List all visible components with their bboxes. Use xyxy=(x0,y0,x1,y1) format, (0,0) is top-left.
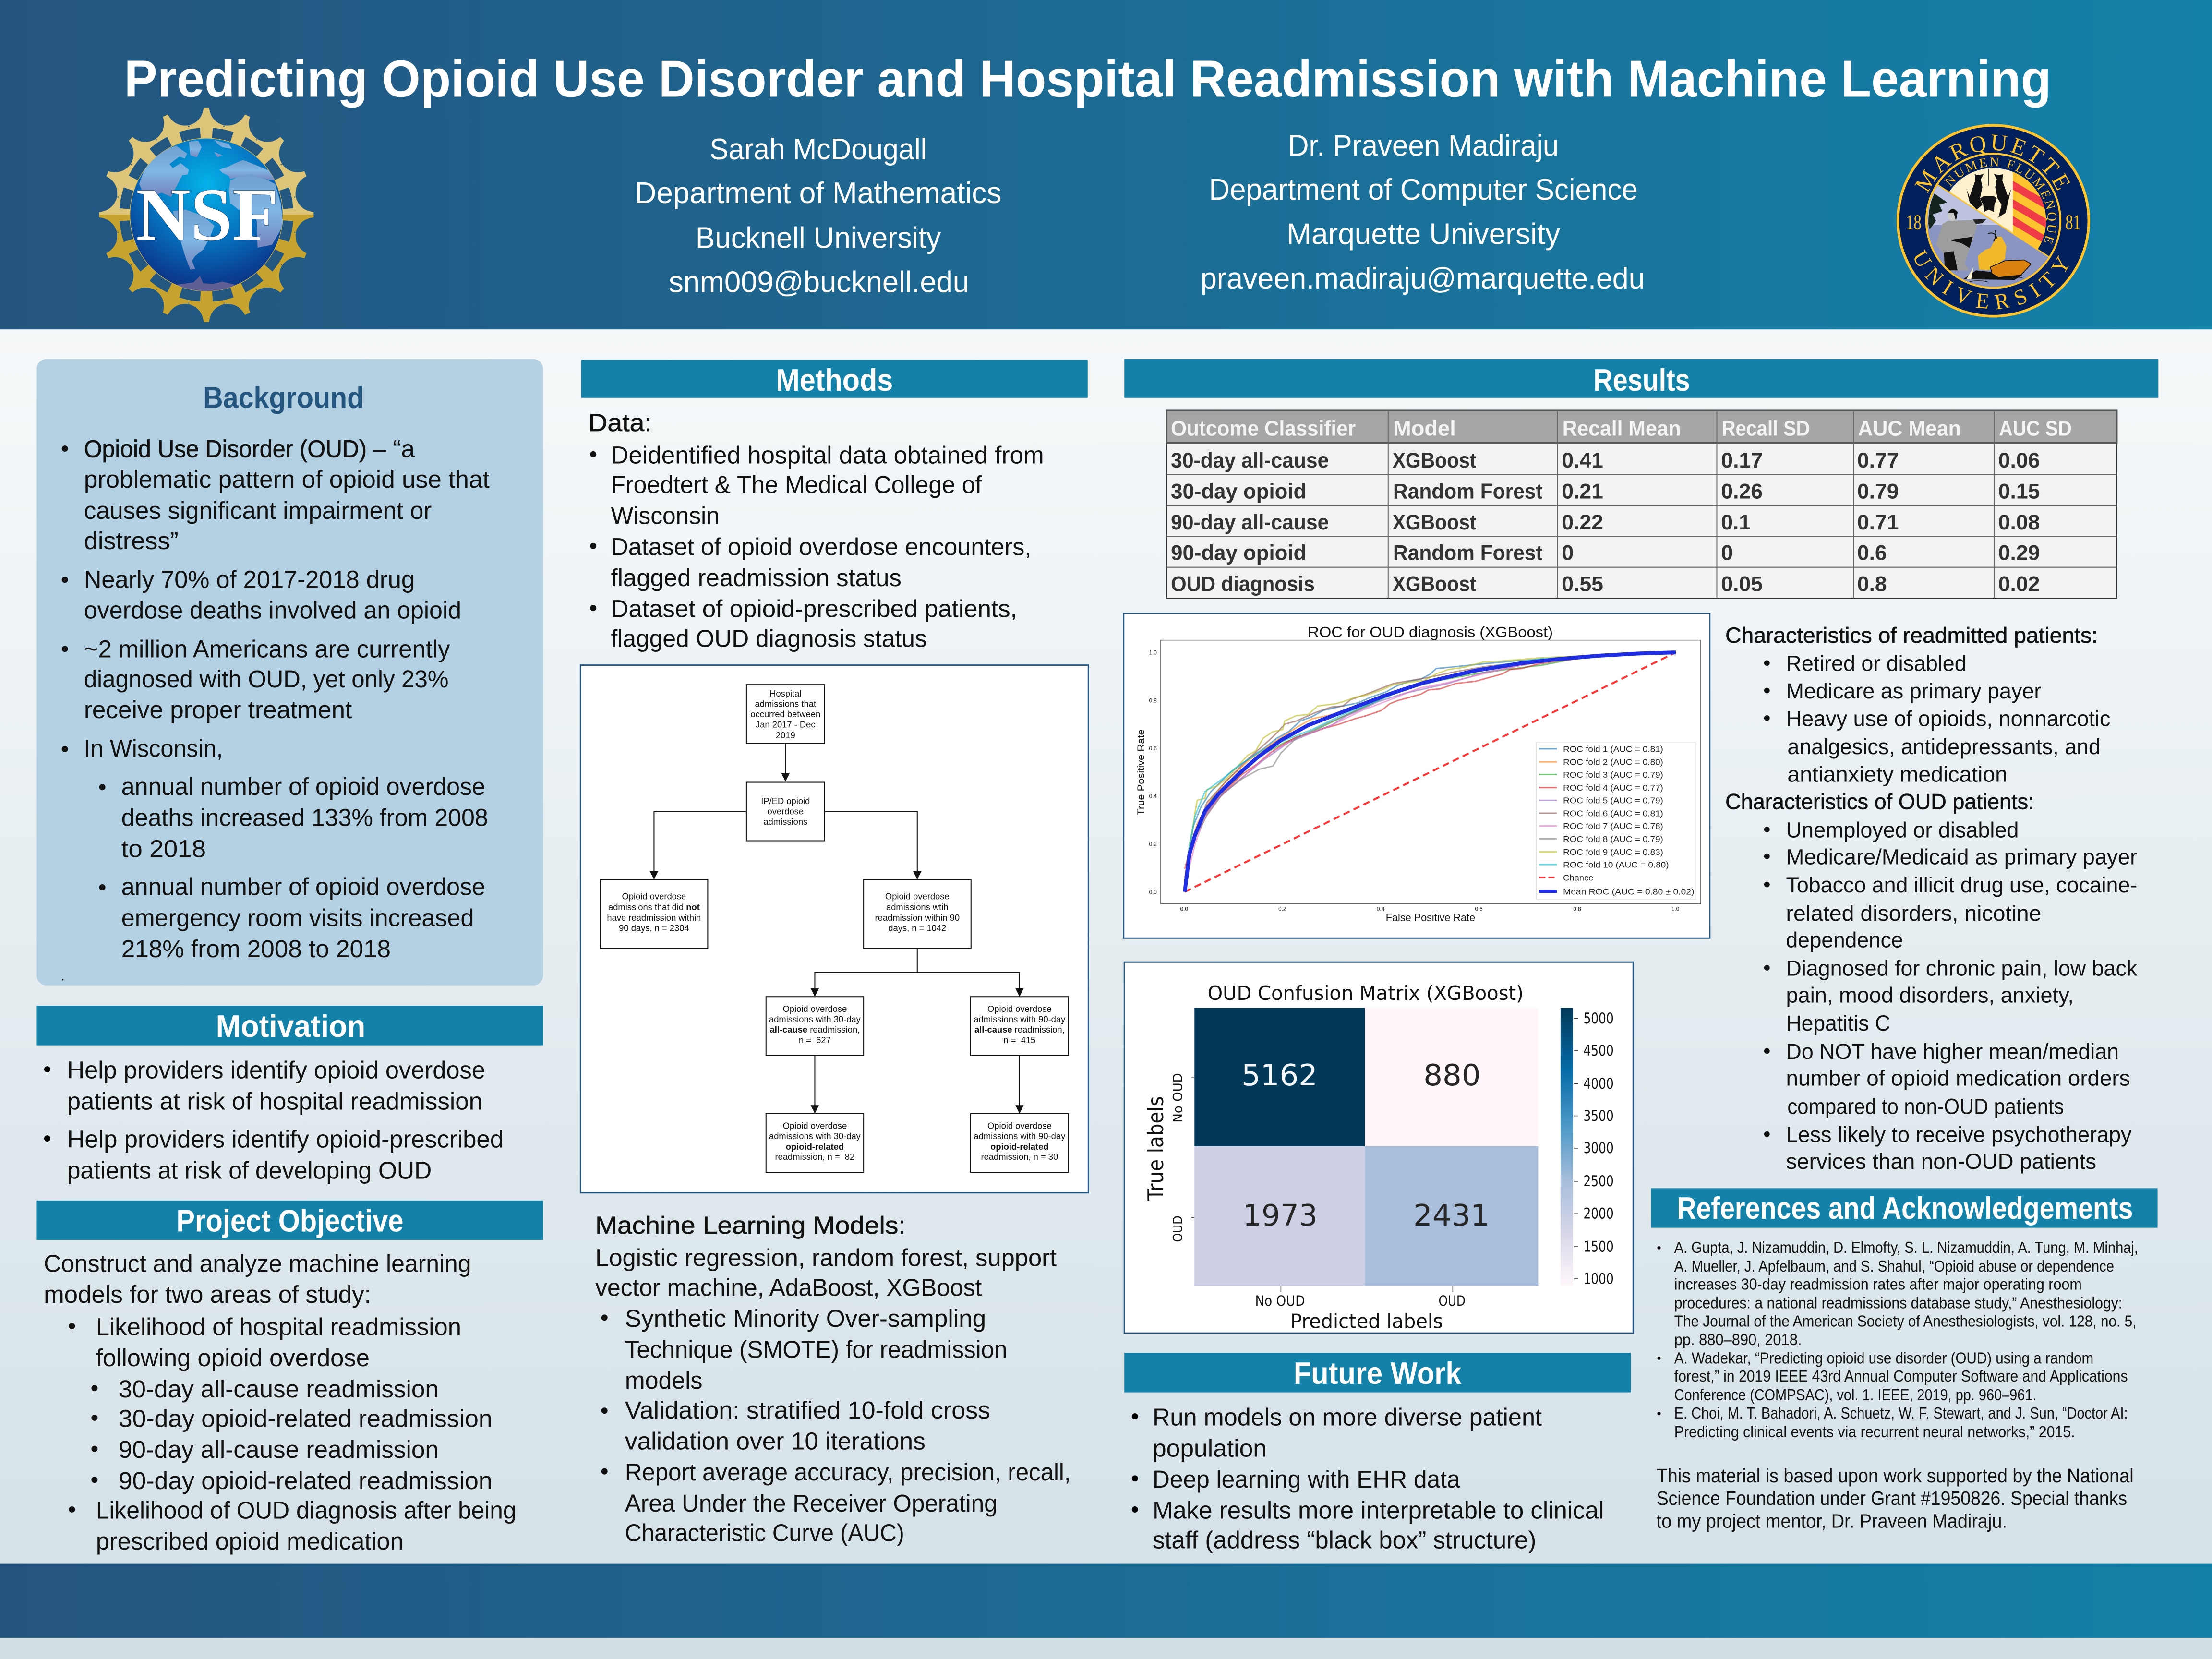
flowchart: patient cohort: admissions with 90-day xyxy=(974,1131,1066,1141)
table: classifier results: 0.71 xyxy=(1857,511,1899,534)
text block: references: pp. 880–890, 2018. xyxy=(1674,1331,1802,1349)
text block: patient characteristics: Less likely to receive psychotherapy xyxy=(1786,1122,2132,1147)
colorbar xyxy=(1561,1008,1614,1287)
table: classifier results: 0.02 xyxy=(1998,572,2040,596)
flowchart: patient cohort: 2019 xyxy=(776,730,795,740)
text block: background bullets xyxy=(62,434,490,980)
text block: project objective: 30-day opioid-related readmission xyxy=(119,1405,493,1432)
text block: machine learning models: vector machine, AdaBoost, XGBoost xyxy=(595,1273,982,1301)
chart: confusion matrix: 5162 xyxy=(1241,1058,1318,1093)
text block: patient characteristics: Do NOT have higher mean/median xyxy=(1786,1039,2119,1064)
text block: patient characteristics: pain, mood disorders, anxiety, xyxy=(1786,983,2074,1007)
icon: Marquette University seal: NUMEN FLUMENQUE xyxy=(1944,157,2056,244)
author block: Sarah McDougall: Department of Mathematics xyxy=(635,177,1002,210)
header banner xyxy=(0,0,2212,329)
text block: data: Wisconsin xyxy=(611,502,720,529)
text block: patient characteristics: Medicare as primary payer xyxy=(1786,679,2041,703)
text block: motivation bullets xyxy=(44,1056,504,1184)
heading: future work: Future Work xyxy=(1294,1356,1462,1391)
chart: confusion matrix: OUD xyxy=(1171,1215,1186,1242)
chart: confusion matrix: OUD xyxy=(1439,1293,1466,1309)
legend: ROC folds xyxy=(1536,742,1696,900)
text block: data: Froedtert & The Medical College of xyxy=(611,470,982,498)
chart: confusion matrix: 2431 xyxy=(1413,1198,1490,1233)
text block: machine learning models: Logistic regression, random forest, support xyxy=(595,1244,1057,1272)
flowchart: patient cohort: Opioid overdose xyxy=(987,1004,1052,1014)
text block: patient characteristics: related disorders, nicotine xyxy=(1786,901,2041,926)
legend: ROC folds: ROC fold 9 (AUC = 0.83) xyxy=(1563,847,1663,857)
chart: confusion matrix: 1973 xyxy=(1243,1198,1318,1233)
legend: ROC folds: Mean ROC (AUC = 0.80 ± 0.02) xyxy=(1563,887,1694,896)
flowchart: patient cohort: admissions that did not xyxy=(608,902,700,912)
text block: references: forest,” in 2019 IEEE 43rd Annual Computer Software and Applications xyxy=(1674,1367,2128,1385)
chart: confusion matrix xyxy=(1124,962,1633,1333)
colorbar: 1500 xyxy=(1583,1238,1614,1255)
flowchart: patient cohort: readmission within 90 xyxy=(875,913,960,923)
icon: NSF logo: NSF xyxy=(136,173,278,257)
text block: background bullets: distress” xyxy=(84,527,179,554)
chart: confusion matrix: 880 xyxy=(1423,1058,1481,1093)
heading: methods: Methods xyxy=(776,362,893,397)
panel: results xyxy=(1124,359,2158,1333)
table: classifier results: AUC SD xyxy=(1999,417,2072,440)
text block: project objective: 30-day all-cause readmission xyxy=(119,1375,439,1403)
table: classifier results: 0.6 xyxy=(1857,541,1887,565)
author block: Dr. Praveen Madiraju: Department of Computer Science xyxy=(1209,173,1638,206)
chart: ROC curves: 0.0 xyxy=(1180,906,1188,912)
text block: references: E. Choi, M. T. Bahadori, A. Schuetz, W. F. Stewart, and J. Sun, “Doctor AI: xyxy=(1674,1404,2128,1422)
table: classifier results: Random Forest xyxy=(1393,480,1543,503)
text block: patient characteristics: Unemployed or disabled xyxy=(1786,817,2019,842)
flowchart: patient cohort: Opioid overdose xyxy=(783,1004,847,1014)
flowchart: patient cohort: admissions that xyxy=(755,698,816,709)
text block: patient characteristics: Characteristics of OUD patients: xyxy=(1725,790,2034,814)
flowchart: patient cohort: overdose xyxy=(768,806,804,817)
legend: ROC folds: ROC fold 8 (AUC = 0.79) xyxy=(1563,834,1663,844)
chart: ROC curves: True Positive Rate xyxy=(1135,729,1146,816)
colorbar: 3000 xyxy=(1583,1140,1614,1157)
text block: references: increases 30-day readmission rates after major operating room xyxy=(1674,1275,2082,1294)
legend: ROC folds: ROC fold 7 (AUC = 0.78) xyxy=(1563,821,1663,831)
chart: ROC curves: 0.2 xyxy=(1149,841,1157,847)
table: classifier results: 0.79 xyxy=(1857,480,1899,503)
table: classifier results: Model xyxy=(1393,417,1456,440)
table: classifier results: 0.08 xyxy=(1998,511,2040,534)
text block: machine learning models: Machine Learning Models: xyxy=(595,1211,906,1239)
chart: ROC curves: 0.2 xyxy=(1278,906,1286,912)
text block: background bullets: 218% from 2008 to 2018 xyxy=(121,935,391,962)
table: classifier results: 0.21 xyxy=(1562,480,1603,503)
flowchart: patient cohort: have readmission within xyxy=(607,913,701,923)
chart: ROC curves xyxy=(1124,613,1710,938)
text block: patient characteristics: number of opioid medication orders xyxy=(1786,1066,2130,1091)
chart: ROC curves: 0.4 xyxy=(1377,906,1385,912)
heading: references: References and Acknowledgements xyxy=(1677,1190,2133,1226)
panel: project objective xyxy=(36,1201,543,1555)
text block: references: A. Mueller, J. Apfelbaum, and S. Shahul, “Opioid abuse or dependence xyxy=(1674,1257,2114,1275)
chart: ROC curves: False Positive Rate xyxy=(1386,912,1475,924)
author block: Sarah McDougall xyxy=(635,133,1002,299)
text block: references: Conference (COMPSAC), vol. 1. IEEE, 2019, pp. 960–961. xyxy=(1674,1386,2036,1404)
text block: machine learning models: Synthetic Minority Over-sampling xyxy=(625,1304,986,1332)
table: classifier results: XGBoost xyxy=(1393,572,1477,596)
heading: project objective xyxy=(36,1201,543,1240)
footer banner xyxy=(0,1564,2212,1638)
table: classifier results: 0.41 xyxy=(1562,449,1603,472)
flowchart: patient cohort: occurred between xyxy=(750,709,820,719)
panel: background xyxy=(36,359,543,986)
text block: data: Deidentified hospital data obtained from xyxy=(611,441,1044,469)
text block: patient characteristics: Tobacco and illicit drug use, cocaine- xyxy=(1786,873,2137,897)
table: classifier results: 0.05 xyxy=(1721,572,1763,596)
author block: Sarah McDougall: Bucknell University xyxy=(696,221,941,254)
chart: ROC curves: 0.8 xyxy=(1573,906,1581,912)
table: classifier results: 0.55 xyxy=(1562,572,1603,596)
text block: future work bullets xyxy=(1132,1403,1604,1553)
text block: background bullets: In Wisconsin, xyxy=(84,734,223,762)
legend: ROC folds: ROC fold 4 (AUC = 0.77) xyxy=(1563,783,1663,793)
table: classifier results: 0.8 xyxy=(1857,572,1887,596)
text block: data: Dataset of opioid overdose encounters, xyxy=(611,532,1031,560)
text block: machine learning models: Technique (SMOTE) for readmission xyxy=(625,1335,1007,1363)
text block: future work bullets: Make results more interpretable to clinical xyxy=(1153,1496,1604,1524)
flowchart: patient cohort: Opioid overdose xyxy=(987,1121,1052,1131)
text block: motivation bullets: patients at risk of hospital readmission xyxy=(67,1087,482,1115)
text block: references: procedures: a national readmissions database study,” Anesthesiology: xyxy=(1674,1294,2122,1312)
text block: project objective: models for two areas of study: xyxy=(44,1280,371,1308)
colorbar: 1000 xyxy=(1583,1270,1614,1287)
chart: confusion matrix: No OUD xyxy=(1255,1293,1305,1309)
text block: future work bullets: staff (address “black box” structure) xyxy=(1153,1526,1536,1553)
icon: Marquette University seal: 18 xyxy=(1906,211,1922,234)
text block: patient characteristics: Medicare/Medicaid as primary payer xyxy=(1786,844,2137,869)
author block: Sarah McDougall: snm009@bucknell.edu xyxy=(669,265,969,299)
text block: patient characteristics: Heavy use of opioids, nonnarcotic xyxy=(1786,706,2110,731)
table: classifier results: 0.26 xyxy=(1721,480,1763,503)
author block: Dr. Praveen Madiraju xyxy=(1201,130,1645,295)
flowchart: patient cohort: IP/ED opioid xyxy=(761,796,810,806)
text block: background bullets: ~2 million Americans are currently xyxy=(84,635,450,662)
flowchart: patient cohort: Opioid overdose xyxy=(885,891,950,902)
chart: ROC curves: 0.8 xyxy=(1149,698,1157,704)
text block: data: Data: xyxy=(588,409,652,436)
icon: Marquette University seal: MARQUETTE xyxy=(1914,134,2070,193)
text block: project objective: 90-day all-cause readmission xyxy=(119,1435,439,1463)
text block: background bullets: diagnosed with OUD, yet only 23% xyxy=(84,665,449,693)
text block: future work bullets: Run models on more diverse patient xyxy=(1153,1403,1542,1431)
text block: motivation bullets: patients at risk of developing OUD xyxy=(67,1156,432,1184)
table: classifier results: 90-day opioid xyxy=(1171,541,1306,565)
colorbar: 2000 xyxy=(1583,1205,1614,1223)
table: classifier results: Random Forest xyxy=(1393,541,1543,565)
text block: references xyxy=(1657,1238,2138,1441)
text block: data: flagged readmission status xyxy=(611,564,902,591)
flowchart: patient cohort: admissions with 30-day xyxy=(769,1131,861,1141)
flowchart: patient cohort: Hospital xyxy=(769,688,801,698)
text block: project objective: Likelihood of OUD diagnosis after being xyxy=(96,1496,517,1524)
table: classifier results: 0.29 xyxy=(1998,541,2040,565)
table: classifier results: 30-day all-cause xyxy=(1171,449,1329,472)
flowchart: patient cohort: admissions with 30-day xyxy=(769,1014,861,1024)
text block: machine learning models: Validation: stratified 10-fold cross xyxy=(625,1396,990,1424)
table: classifier results: Recall Mean xyxy=(1563,417,1681,440)
text block: background bullets: annual number of opioid overdose xyxy=(121,873,485,901)
text block: references: A. Gupta, J. Nizamuddin, D. Elmofty, S. L. Nizamuddin, A. Tung, M. Minhaj, xyxy=(1674,1238,2138,1257)
heading: future work xyxy=(1124,1353,1631,1393)
text block: background bullets: deaths increased 133% from 2008 xyxy=(121,804,488,831)
text block: acknowledgement xyxy=(1657,1465,2134,1532)
flowchart: patient cohort: all-cause readmission, xyxy=(974,1024,1065,1034)
legend: ROC folds: Chance xyxy=(1563,873,1594,882)
text block: background bullets: – “a xyxy=(373,434,415,462)
text block: patient characteristics: dependence xyxy=(1786,928,1903,952)
table: classifier results: 0 xyxy=(1562,541,1574,565)
text block: background bullets: Opioid Use Disorder (OUD) xyxy=(84,434,367,462)
legend: ROC folds: ROC fold 2 (AUC = 0.80) xyxy=(1563,757,1663,767)
icon: NSF logo xyxy=(99,108,313,322)
text block: references: The Journal of the American Society of Anesthesiologists, vol. 128, no. 5, xyxy=(1674,1312,2136,1330)
text block: patient characteristics: compared to non-OUD patients xyxy=(1787,1094,2064,1118)
author block: Dr. Praveen Madiraju: Dr. Praveen Madiraju xyxy=(1288,130,1559,163)
table: classifier results: 30-day opioid xyxy=(1171,480,1306,503)
text block: references: A. Wadekar, “Predicting opioid use disorder (OUD) using a random xyxy=(1674,1349,2093,1367)
table: classifier results: 90-day all-cause xyxy=(1171,511,1329,534)
heading: motivation: Motivation xyxy=(216,1009,365,1044)
icon: Marquette University seal: UNIVERSITY xyxy=(1914,249,2069,309)
author block: Dr. Praveen Madiraju: praveen.madiraju@marquette.edu xyxy=(1201,262,1645,295)
text block: acknowledgement: This material is based upon work supported by the National xyxy=(1657,1465,2134,1487)
flowchart: patient cohort: n = 627 xyxy=(799,1035,831,1045)
chart: ROC curves: 0.0 xyxy=(1149,889,1157,895)
text block: acknowledgement: Science Foundation under Grant #1950826. Special thanks xyxy=(1657,1487,2127,1509)
flowchart: patient cohort: admissions xyxy=(763,817,807,827)
panel: motivation xyxy=(36,1006,543,1184)
text block: machine learning models: Area Under the Receiver Operating xyxy=(625,1489,998,1517)
text block: acknowledgement: to my project mentor, Dr. Praveen Madiraju. xyxy=(1657,1510,2007,1532)
chart: confusion matrix: No OUD xyxy=(1171,1073,1186,1123)
text block: data: flagged OUD diagnosis status xyxy=(611,624,927,652)
flowchart: patient cohort xyxy=(580,665,1088,1193)
author block: Dr. Praveen Madiraju: Marquette University xyxy=(1286,217,1560,251)
icon: Marquette University seal: 81 xyxy=(2065,211,2081,234)
text block: background bullets: emergency room visits increased xyxy=(121,903,474,931)
flowchart: patient cohort: 90 days, n = 2304 xyxy=(619,923,689,933)
flowchart: patient cohort: readmission, n = 30 xyxy=(981,1152,1058,1162)
heading: project objective: Project Objective xyxy=(176,1203,403,1238)
flowchart: patient cohort: days, n = 1042 xyxy=(888,923,946,933)
text block: background bullets: overdose deaths involved an opioid xyxy=(84,596,461,624)
text block: project objective xyxy=(44,1249,517,1555)
chart: confusion matrix: Predicted labels xyxy=(1290,1310,1443,1333)
text block: motivation bullets: Help providers identify opioid overdose xyxy=(67,1056,485,1084)
text block: motivation bullets: Help providers identify opioid-prescribed xyxy=(67,1125,504,1153)
legend: ROC folds: ROC fold 10 (AUC = 0.80) xyxy=(1563,860,1669,870)
text block: project objective: prescribed opioid medication xyxy=(96,1527,403,1555)
text block: data: Dataset of opioid-prescribed patients, xyxy=(611,595,1017,623)
text block: patient characteristics: Characteristics of readmitted patients: xyxy=(1725,623,2098,648)
colorbar: 4500 xyxy=(1583,1042,1614,1059)
table: classifier results: AUC Mean xyxy=(1858,417,1961,440)
chart: ROC curves: 1.0 xyxy=(1671,906,1680,912)
flowchart: patient cohort: readmission, n = 82 xyxy=(775,1152,854,1162)
table: classifier results xyxy=(1166,410,2117,598)
title: Predicting Opioid Use Disorder and Hospital Readmission with Machine Learning xyxy=(124,50,2051,108)
table: classifier results: XGBoost xyxy=(1393,449,1477,472)
text block: background bullets: receive proper treatment xyxy=(84,696,352,723)
text block: patient characteristics xyxy=(1725,623,2137,1174)
text block: patient characteristics: antianxiety medication xyxy=(1787,762,2008,786)
text block: project objective: Likelihood of hospital readmission xyxy=(96,1313,461,1341)
text block: patient characteristics: Hepatitis C xyxy=(1786,1011,1890,1035)
panel: methods xyxy=(580,360,1088,1547)
table: classifier results: OUD diagnosis xyxy=(1171,572,1315,596)
text block: background bullets: Nearly 70% of 2017-2018 drug xyxy=(84,565,415,593)
legend: ROC folds: ROC fold 5 (AUC = 0.79) xyxy=(1563,796,1663,805)
text block: patient characteristics: Diagnosed for chronic pain, low back xyxy=(1786,956,2137,980)
flowchart: patient cohort: opioid-related xyxy=(990,1142,1049,1152)
flowchart: patient cohort: opioid-related xyxy=(786,1142,844,1152)
table: classifier results: 0.22 xyxy=(1562,511,1603,534)
table: classifier results: 0.77 xyxy=(1857,449,1899,472)
text block: machine learning models xyxy=(595,1211,1071,1547)
text block: data xyxy=(588,409,1044,652)
colorbar: 3500 xyxy=(1583,1107,1614,1125)
chart: confusion matrix: OUD Confusion Matrix (XGBoost) xyxy=(1208,982,1524,1005)
text block: future work bullets: population xyxy=(1153,1434,1267,1462)
text block: background bullets: to 2018 xyxy=(121,834,206,862)
flowchart: patient cohort: admissions with 90-day xyxy=(974,1014,1066,1024)
flowchart: patient cohort: Opioid overdose xyxy=(622,891,686,902)
table: classifier results: Outcome Classifier xyxy=(1171,417,1356,440)
flowchart: patient cohort: n = 415 xyxy=(1003,1035,1035,1045)
text block: background bullets: annual number of opioid overdose xyxy=(121,772,485,800)
text block: machine learning models: validation over 10 iterations xyxy=(625,1427,926,1455)
colorbar: 4000 xyxy=(1583,1075,1614,1093)
table: classifier results: 0.17 xyxy=(1721,449,1763,472)
heading: results xyxy=(1124,359,2158,398)
text block: project objective: Construct and analyze machine learning xyxy=(44,1249,471,1277)
flowchart: patient cohort: all-cause readmission, xyxy=(770,1024,860,1034)
text block: machine learning models: models xyxy=(625,1366,703,1394)
colorbar: 2500 xyxy=(1583,1173,1614,1190)
colorbar: 5000 xyxy=(1583,1010,1614,1027)
flowchart: patient cohort: admissions wtih xyxy=(886,902,949,912)
chart: ROC curves: 0.6 xyxy=(1475,906,1483,912)
heading: methods xyxy=(581,360,1088,398)
author block: Sarah McDougall: Sarah McDougall xyxy=(709,133,927,166)
flowchart: patient cohort: Opioid overdose xyxy=(783,1121,847,1131)
table: classifier results: 0 xyxy=(1721,541,1733,565)
text block: background bullets: problematic pattern of opioid use that xyxy=(84,465,490,493)
table: classifier results: XGBoost xyxy=(1393,511,1477,534)
legend: ROC folds: ROC fold 3 (AUC = 0.79) xyxy=(1563,770,1663,780)
icon: Marquette University seal xyxy=(1896,124,2090,318)
text block: background bullets: causes significant impairment or xyxy=(84,496,432,524)
text block: references: Predicting clinical events via recurrent neural networks,” 2015. xyxy=(1674,1423,2075,1441)
chart: ROC curves: 0.4 xyxy=(1149,793,1157,800)
chart: ROC curves: 1.0 xyxy=(1149,650,1157,656)
text block: project objective: following opioid overdose xyxy=(96,1344,370,1371)
chart: ROC curves: ROC for OUD diagnosis (XGBoost) xyxy=(1308,624,1553,640)
text block: project objective: 90-day opioid-related readmission xyxy=(119,1467,493,1494)
text block: patient characteristics: Retired or disabled xyxy=(1786,651,1967,676)
chart: ROC curves: 0.6 xyxy=(1149,745,1157,752)
text block: machine learning models: Characteristic Curve (AUC) xyxy=(625,1519,904,1547)
heading: background: Background xyxy=(203,381,364,414)
legend: ROC folds: ROC fold 6 (AUC = 0.81) xyxy=(1563,808,1663,818)
table: classifier results: 0.06 xyxy=(1998,449,2040,472)
text block: machine learning models: Report average accuracy, precision, recall, xyxy=(625,1458,1071,1486)
panel: references and acknowledgements xyxy=(1651,1188,2158,1532)
table: classifier results: 0.1 xyxy=(1721,511,1751,534)
text block: patient characteristics: services than non-OUD patients xyxy=(1786,1149,2096,1174)
legend: ROC folds: ROC fold 1 (AUC = 0.81) xyxy=(1563,744,1663,754)
heading: motivation xyxy=(36,1006,543,1046)
table: classifier results: Recall SD xyxy=(1722,417,1810,440)
text block: future work bullets: Deep learning with EHR data xyxy=(1153,1465,1460,1493)
flowchart: patient cohort: Jan 2017 - Dec xyxy=(756,720,816,730)
heading: results: Results xyxy=(1593,362,1690,397)
table: classifier results: 0.15 xyxy=(1998,480,2040,503)
panel: future work xyxy=(1124,1353,1631,1553)
text block: patient characteristics: analgesics, antidepressants, and xyxy=(1787,734,2101,759)
chart: confusion matrix: True labels xyxy=(1144,1096,1168,1201)
